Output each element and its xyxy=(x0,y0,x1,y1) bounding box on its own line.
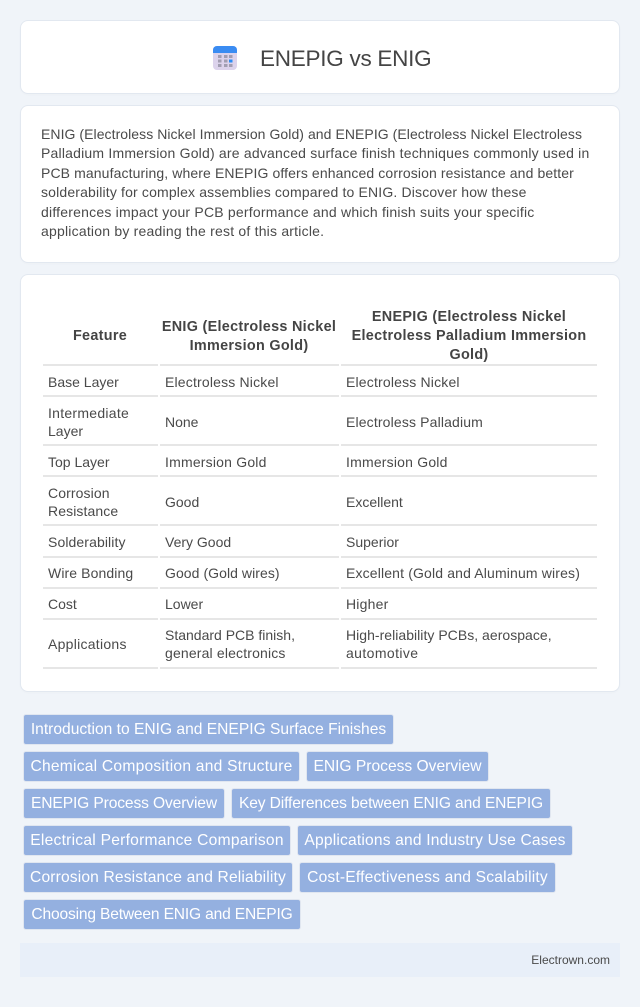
icon: calendar xyxy=(213,46,237,70)
table header: Gold) xyxy=(449,347,489,363)
row: intermediate layer: Electroless Palladium xyxy=(346,414,483,430)
tag xyxy=(306,751,489,782)
tag: Introduction to ENIG and ENEPIG Surface Finishes xyxy=(31,721,386,738)
tag: Chemical Composition and Structure xyxy=(30,758,293,775)
row: cost xyxy=(48,596,388,612)
tag xyxy=(23,714,394,745)
description text xyxy=(41,126,589,239)
row: corrosion resistance: Good xyxy=(165,494,199,510)
header panel xyxy=(20,20,620,94)
tag: Applications and Industry Use Cases xyxy=(304,832,566,849)
tag xyxy=(23,788,225,819)
row: intermediate layer: None xyxy=(165,414,198,430)
source credit: Electrown.com xyxy=(531,953,610,967)
row: intermediate layer xyxy=(48,405,483,439)
description text: solderability for complex assemblies compared to ENIG. Discover how these xyxy=(41,184,527,200)
tag xyxy=(23,862,293,893)
row: base layer: Electroless Nickel xyxy=(346,374,460,390)
row: applications: automotive xyxy=(346,645,418,661)
description text: PCB manufacturing, where ENEPIG offers enhanced corrosion resistance and better xyxy=(41,165,574,181)
row: solderability xyxy=(48,534,399,550)
description text: Palladium Immersion Gold) are advanced surface finish techniques commonly used in xyxy=(41,145,589,161)
tag xyxy=(23,751,300,782)
row: cost: Higher xyxy=(346,596,388,612)
description panel xyxy=(20,105,620,263)
row: applications: Applications xyxy=(48,636,127,652)
row: base layer: Base Layer xyxy=(48,374,119,390)
row: top layer: Immersion Gold xyxy=(165,454,267,470)
tag: Electrical Performance Comparison xyxy=(30,832,284,849)
row: applications: Standard PCB finish, xyxy=(165,627,295,643)
description text: ENIG (Electroless Nickel Immersion Gold) and ENEPIG (Electroless Nickel Electroless xyxy=(41,126,582,142)
row: top layer: Top Layer xyxy=(48,454,109,470)
tag: Choosing Between ENIG and ENEPIG xyxy=(31,906,293,923)
row: solderability: Solderability xyxy=(48,534,126,550)
tag xyxy=(299,862,556,893)
table header: ENEPIG (Electroless Nickel xyxy=(372,309,566,325)
footer bar xyxy=(20,943,620,977)
table header: Feature xyxy=(73,328,127,344)
row: intermediate layer: Intermediate xyxy=(48,405,129,421)
table header xyxy=(73,309,586,363)
tag: Key Differences between ENIG and ENEPIG xyxy=(239,795,543,812)
table header: Immersion Gold) xyxy=(190,338,308,354)
row: base layer xyxy=(48,374,460,390)
row: applications: general electronics xyxy=(165,645,286,661)
row: corrosion resistance: Resistance xyxy=(48,503,118,519)
row: corrosion resistance xyxy=(48,485,403,519)
row: wire bonding: Excellent (Gold and Aluminum wires) xyxy=(346,565,580,581)
row: applications xyxy=(48,627,552,661)
tag xyxy=(297,825,573,856)
description text: application by reading the rest of this article. xyxy=(41,223,324,239)
row: corrosion resistance: Excellent xyxy=(346,494,403,510)
tag xyxy=(231,788,551,819)
description text: differences impact your PCB performance and which finish suits your specific xyxy=(41,204,534,220)
title: ENEPIG vs ENIG xyxy=(260,46,431,71)
topic tags xyxy=(23,714,573,930)
row: intermediate layer: Layer xyxy=(48,423,83,439)
row: wire bonding: Good (Gold wires) xyxy=(165,565,280,581)
tag: ENIG Process Overview xyxy=(313,758,482,775)
tag xyxy=(23,825,291,856)
row: wire bonding: Wire Bonding xyxy=(48,565,133,581)
row: top layer xyxy=(48,454,448,470)
row: solderability: Superior xyxy=(346,534,399,550)
comparison table panel xyxy=(20,274,620,692)
tag: Cost-Effectiveness and Scalability xyxy=(307,869,548,886)
tag: ENEPIG Process Overview xyxy=(31,795,217,812)
row: top layer: Immersion Gold xyxy=(346,454,448,470)
row: base layer: Electroless Nickel xyxy=(165,374,279,390)
row: cost: Lower xyxy=(165,596,203,612)
tag: Corrosion Resistance and Reliability xyxy=(30,869,286,886)
row: cost: Cost xyxy=(48,596,77,612)
row: solderability: Very Good xyxy=(165,534,231,550)
tag xyxy=(23,899,301,930)
comparison table xyxy=(43,309,597,669)
row: applications: High-reliability PCBs, aerospace, xyxy=(346,627,552,643)
row: wire bonding xyxy=(48,565,580,581)
row: corrosion resistance: Corrosion xyxy=(48,485,110,501)
table header: ENIG (Electroless Nickel xyxy=(162,319,336,335)
table header: Electroless Palladium Immersion xyxy=(352,328,586,344)
